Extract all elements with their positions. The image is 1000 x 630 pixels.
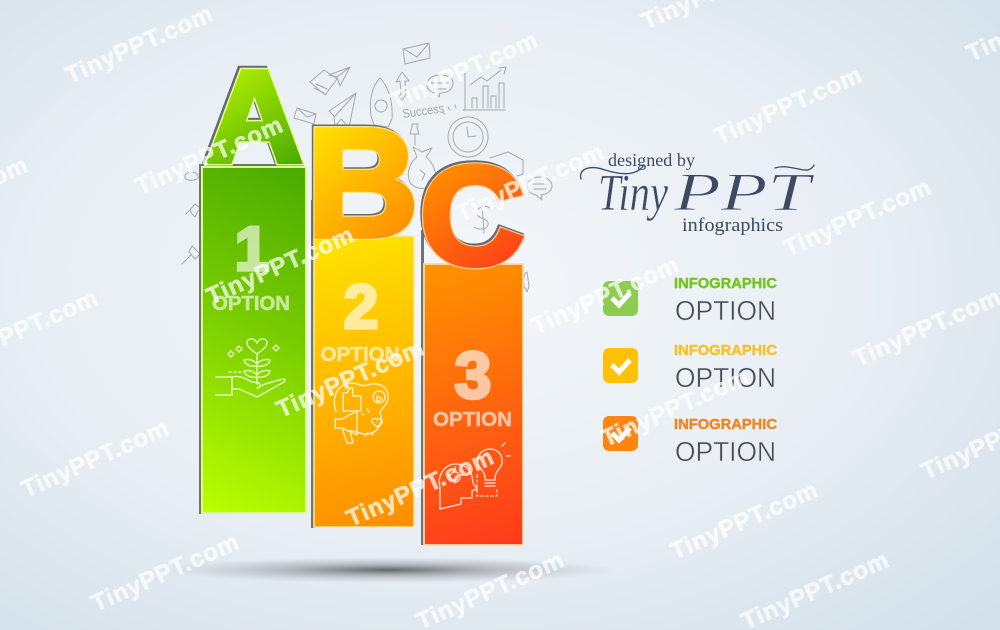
watermark: TinyPPT.com [386,26,543,115]
number 2: 2 [344,273,378,342]
OPTION label 3: OPTION [433,409,512,431]
heading: INFOGRAPHIC yellow: INFOGRAPHIC [674,343,778,359]
icon: rising chart [463,67,506,110]
column B bar [314,236,414,527]
icon: left pin one [186,204,201,217]
letter B shadow: B [306,96,417,268]
column A shadow edge [199,164,304,514]
letter C shadow: C [418,136,523,293]
letter B: B [307,97,418,269]
text: OPTION: OPTION [675,436,776,467]
icon: envelope top [403,43,430,64]
letter A shadow: A [205,42,300,187]
letter A: A [207,44,302,189]
option row 3 [603,416,778,467]
icon: small paper plane [329,67,350,86]
column B shadow edge [311,200,315,528]
option row 1 [603,276,778,326]
letter B outline: B [307,97,418,269]
watermark: TinyPPT.com [666,476,823,565]
icon: right speech bubble [527,177,552,200]
text: OPTION: OPTION [675,295,776,326]
icon: push pin [410,124,419,145]
doodle icons cluster [182,43,552,292]
column A bar [202,167,306,513]
text: infographics: infographics [682,215,783,236]
watermark: TinyPPT.com [17,414,174,503]
heading: INFOGRAPHIC green: INFOGRAPHIC [674,276,778,292]
watermark: TinyPPT.com [131,111,288,200]
column C [418,136,524,545]
icon: plant in hand [216,339,285,397]
heading: INFOGRAPHIC orange: INFOGRAPHIC [674,417,778,433]
watermark: TinyPPT.com [779,173,936,262]
floor shadow [160,557,616,583]
watermark: TinyPPT.com [342,443,499,532]
watermark: TinyPPT.com [527,251,684,340]
checkbox orange [603,416,638,451]
icon: up arrow [396,72,409,100]
watermark: TinyPPT.com [452,138,609,227]
OPTION label 2: OPTION [320,344,400,366]
column B [306,96,418,528]
column C bar [424,264,523,545]
number 3: 3 [455,338,491,412]
watermark: TinyPPT.com [597,363,754,452]
option list [603,276,778,467]
icon: bottom lamp [524,272,529,292]
icon: dollar doodle in C counter [474,203,490,233]
watermark: TinyPPT.com [61,0,218,89]
watermark: TinyPPT.com [272,334,429,423]
icon: rocket [370,78,392,127]
checkbox yellow [603,348,638,383]
watermark: TinyPPT.com [710,61,867,150]
watermark: TinyPPT.com [87,528,244,617]
watermark: TinyPPT.com [202,221,359,310]
icon: note [310,70,337,95]
icon: head with gear and bulb [439,443,510,509]
icon: envelope left [294,108,316,124]
icon: money bag [408,147,436,188]
letter C outline: C [420,138,524,295]
text: OPTION: OPTION [675,362,776,393]
icon: clock [442,105,488,157]
letter A outline: A [207,44,302,189]
letter C: C [420,138,524,295]
icon: left pin two [182,246,200,264]
checkbox green [603,281,638,316]
logo: designed by TinyPPT infographics [581,150,816,236]
number 1: 1 [235,215,269,284]
icon: coil [185,172,198,180]
text: PPT script wordmark: PPT [673,162,816,222]
column A [199,42,306,514]
option row 2 [603,343,778,393]
icon: speech bubble top [427,75,453,97]
text: Tiny script wordmark: Tiny [598,165,669,222]
OPTION label 1: OPTION [212,293,290,315]
icon: box [490,152,523,176]
flourish strokes [581,165,814,179]
label: Success: Success [401,101,445,121]
column C shadow edge [421,230,424,545]
icon: megaphone and likes [334,383,388,443]
icon: large paper plane [329,93,356,127]
text: designed by: designed by [608,150,695,170]
